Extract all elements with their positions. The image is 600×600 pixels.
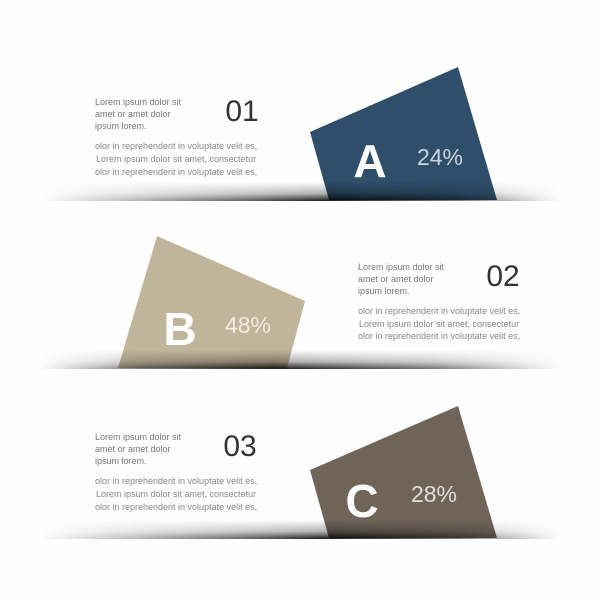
body text 3: olor in reprehenderit in voluptate velit es,	[95, 502, 257, 512]
shadow 2	[46, 352, 552, 369]
percent 24%: 24%	[417, 144, 463, 170]
heading text 3: amet or amet dolor	[95, 444, 171, 454]
number 01: 01	[225, 95, 259, 128]
body text 2: olor in reprehenderit in voluptate velit es,	[358, 331, 520, 341]
heading text 2: Lorem ipsum dolor sit	[358, 262, 445, 272]
heading text 1: amet or amet dolor	[95, 109, 171, 119]
body text 1: Lorem ipsum dolor sit amet, consectetur	[96, 154, 256, 164]
body text 2: Lorem ipsum dolor sit amet, consectetur	[359, 319, 519, 329]
body text 3: olor in reprehenderit in voluptate velit es,	[95, 476, 257, 486]
shape A	[310, 67, 497, 200]
body text 3: Lorem ipsum dolor sit amet, consectetur	[96, 489, 256, 499]
letter B: B	[163, 303, 197, 355]
heading text 3: ipsum lorem.	[95, 456, 147, 466]
panel: item 01	[40, 67, 560, 201]
body text 1: olor in reprehenderit in voluptate velit es,	[95, 167, 257, 177]
body text 1: olor in reprehenderit in voluptate velit es,	[95, 141, 257, 151]
panel: item 02	[40, 236, 560, 369]
panel: item 03	[40, 406, 560, 539]
number 03: 03	[223, 430, 257, 463]
shape C	[310, 406, 497, 538]
letter A: A	[353, 135, 387, 187]
heading text 3: Lorem ipsum dolor sit	[95, 432, 182, 442]
shadow 1	[52, 184, 554, 201]
shape B	[118, 236, 305, 368]
heading text 2: ipsum lorem.	[358, 286, 410, 296]
percent 28%: 28%	[411, 481, 457, 507]
heading text 1: Lorem ipsum dolor sit	[95, 97, 182, 107]
shadow 3	[52, 522, 554, 539]
number 02: 02	[486, 260, 520, 293]
percent 48%: 48%	[225, 312, 271, 338]
body text 2: olor in reprehenderit in voluptate velit es,	[358, 306, 520, 316]
heading text 1: ipsum lorem.	[95, 121, 147, 131]
heading text 2: amet or amet dolor	[358, 274, 434, 284]
letter C: C	[345, 475, 379, 527]
